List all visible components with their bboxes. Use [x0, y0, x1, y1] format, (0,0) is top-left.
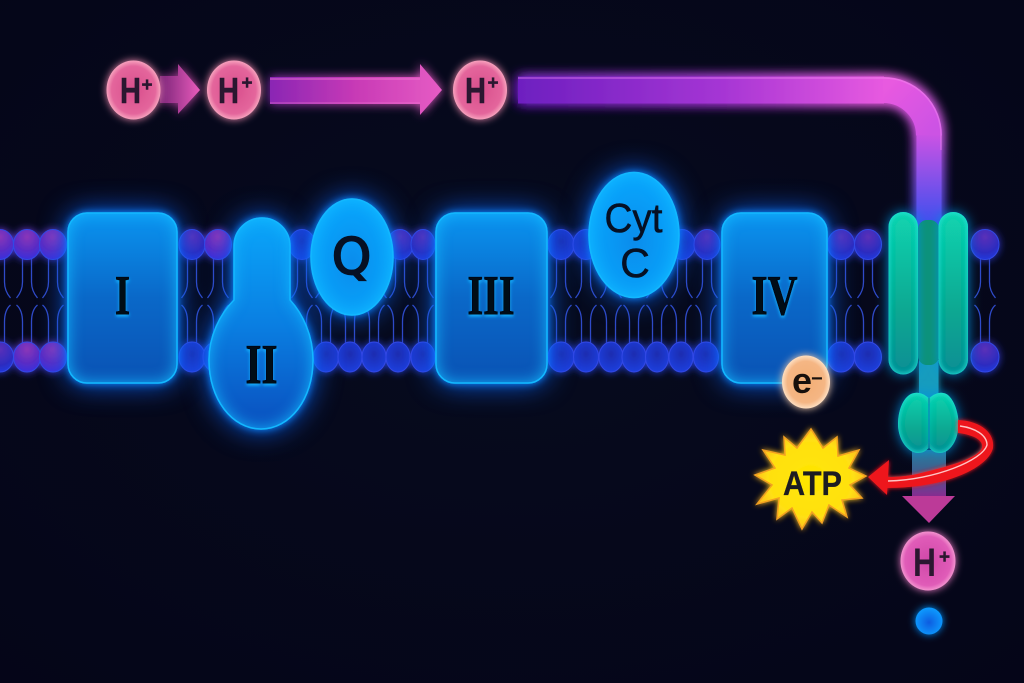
arrow: first proton step: [160, 64, 200, 114]
electron e-: e: [792, 360, 812, 401]
proton H+ below membrane: [900, 532, 956, 590]
label: C: C: [620, 240, 650, 286]
proton H+ 3: [453, 60, 507, 120]
proton H+ below membrane: +: [939, 547, 950, 568]
proton H+ 1: [106, 60, 160, 120]
rotor head: [898, 393, 958, 453]
lipid heads, bottom row: [0, 342, 999, 372]
stem: [919, 360, 938, 398]
proton H+ 2: [207, 60, 261, 120]
lipid tails: [0, 256, 996, 344]
label: II: II: [246, 334, 278, 396]
label: Q: Q: [332, 228, 371, 286]
ubiquinone Q: [311, 199, 393, 315]
center column: [918, 220, 939, 365]
ATP starburst: [755, 429, 866, 529]
arrow: second proton step: [270, 64, 442, 115]
complex III: [436, 213, 547, 383]
left subunit: [888, 212, 918, 374]
right subunit: [938, 212, 968, 374]
proton H+ below membrane: H: [913, 541, 936, 585]
down arrow: [902, 450, 955, 523]
complex II: [209, 218, 313, 429]
label: Cyt: Cyt: [604, 195, 663, 241]
cytochrome C: [589, 172, 679, 298]
proton H+ 2: +: [242, 73, 253, 94]
proton H+ 3: +: [488, 73, 499, 94]
electron e-: −: [811, 368, 823, 390]
proton gradient pipe: [518, 78, 941, 228]
red rotation arrow: [868, 420, 993, 495]
complex IV: [722, 213, 827, 383]
label: III: III: [468, 265, 514, 327]
label: IV: IV: [752, 265, 798, 327]
proton H+ 1: +: [142, 75, 153, 96]
proton H+ 2: H: [218, 70, 239, 111]
complex I: [68, 213, 177, 383]
lipid bilayer membrane: [0, 230, 999, 372]
electron e-: [782, 356, 830, 408]
lipid heads, top row: [0, 230, 999, 260]
label: I: I: [115, 265, 130, 327]
proton H+ 1: H: [120, 70, 141, 111]
label: ATP: ATP: [783, 465, 842, 503]
proton H+ 3: H: [465, 70, 486, 111]
ATP synthase channel: [888, 212, 968, 398]
blue dot: [916, 608, 942, 634]
